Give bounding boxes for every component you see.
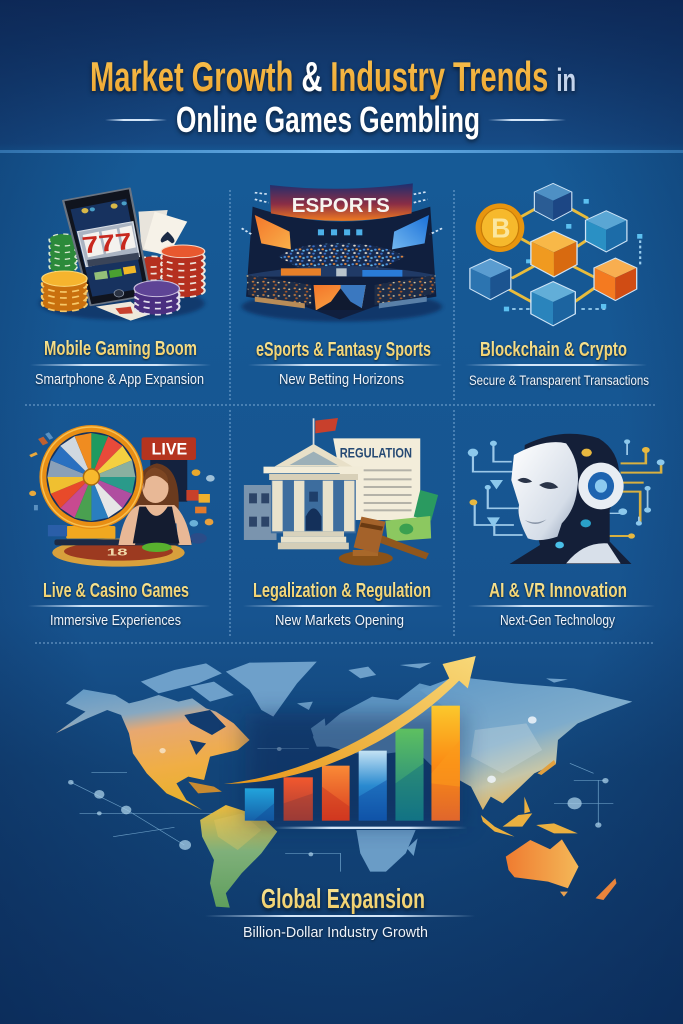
subheading: New Betting Horizons: [279, 371, 404, 388]
arrow: [224, 656, 476, 784]
icon: roulette wheel and dealer: [29, 425, 215, 567]
title: [90, 53, 576, 140]
icon: courthouse, document and gavel: [244, 418, 438, 566]
heading: Mobile Gaming Boom: [44, 338, 197, 360]
icon: smartphone with slot machine and chips: [39, 188, 205, 321]
bar chart with growth arrow: [224, 656, 476, 829]
subheading: Immersive Experiences: [50, 612, 181, 629]
roulette wheel: [39, 425, 143, 529]
subheading: Billion-Dollar Industry Growth: [243, 924, 428, 941]
panel: esports and fantasy sports: [242, 183, 442, 388]
text: 777: 777: [80, 227, 134, 258]
text: LIVE: LIVE: [152, 440, 187, 459]
title: Market Growth & Industry Trends in: [90, 53, 576, 100]
panel: blockchain and crypto: [465, 183, 649, 388]
subheading: Next-Gen Technology: [500, 612, 615, 629]
panel: global expansion: [56, 656, 632, 941]
heading: Legalization & Regulation: [253, 580, 431, 602]
subheading: Secure & Transparent Transactions: [469, 372, 649, 388]
world map: [56, 662, 632, 908]
heading: Live & Casino Games: [43, 580, 189, 602]
subheading: New Markets Opening: [275, 612, 404, 629]
heading: Blockchain & Crypto: [480, 339, 627, 361]
icon: esports arena: [242, 183, 442, 322]
subheading: Smartphone & App Expansion: [35, 371, 204, 388]
text: bitcoin symbol: B: [491, 212, 510, 243]
text: table number: 18: [107, 547, 128, 558]
heading: AI & VR Innovation: [489, 580, 627, 602]
icon: blockchain network with bitcoin: [470, 183, 642, 326]
blockchain cubes: [470, 183, 637, 326]
panel: AI and VR innovation: [468, 434, 665, 629]
panel: legalization and regulation: [243, 418, 443, 629]
text: REGULATION: REGULATION: [340, 446, 412, 461]
heading: eSports & Fantasy Sports: [256, 339, 431, 361]
grid dividers: [25, 190, 655, 643]
bars: [245, 706, 460, 821]
panel: live and casino games: [28, 425, 215, 629]
heading: Global Expansion: [261, 883, 425, 914]
title: Online Games Gembling: [176, 99, 480, 140]
icon: AI robot head with circuits: [468, 434, 665, 564]
text: ESPORTS: ESPORTS: [292, 194, 390, 217]
panel: mobile gaming boom: [30, 188, 211, 388]
